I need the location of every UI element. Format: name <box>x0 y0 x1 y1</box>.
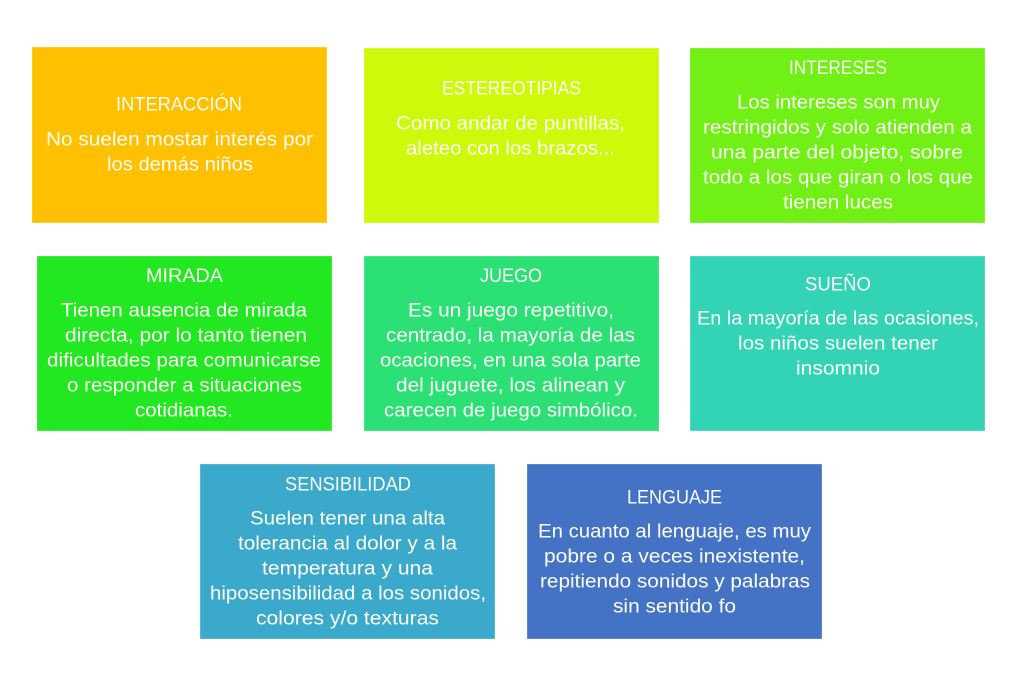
panel: juego <box>364 256 659 431</box>
text block: sueño <box>697 308 979 379</box>
heading: estereotipias: ESTEREOTIPIAS <box>442 78 581 99</box>
text block: lenguaje: En cuanto al lenguaje, es muy <box>538 521 812 542</box>
text block: interacción: los demás niños <box>107 154 253 175</box>
text block: mirada: directa, por lo tanto tienen <box>65 325 307 346</box>
text block: sensibilidad: colores y/o texturas <box>256 608 439 629</box>
text block: intereses: Los intereses son muy <box>737 92 941 113</box>
panel: sensibilidad <box>200 464 495 639</box>
text block: intereses <box>703 92 973 213</box>
text block: juego <box>380 300 641 421</box>
text block: lenguaje: repitiendo sonidos y palabras <box>540 571 810 592</box>
text block: sensibilidad: hiposensibilidad a los sonidos, <box>210 583 486 604</box>
text block: sueño: insomnio <box>796 358 880 379</box>
heading: juego: JUEGO <box>480 266 542 287</box>
text block: sueño: En la mayoría de las ocasiones, <box>697 308 979 329</box>
text block: juego: Es un juego repetitivo, <box>408 300 614 321</box>
panel: sueño <box>690 256 985 431</box>
text block: sensibilidad <box>210 508 486 629</box>
text block: mirada: Tienen ausencia de mirada <box>61 300 307 321</box>
text block: mirada: dificultades para comunicarse <box>47 350 321 371</box>
text block: juego: centrado, la mayoría de las <box>386 325 635 346</box>
text block: juego: ocaciones, en una sola parte <box>380 350 641 371</box>
heading: interacción: INTERACCIÓN <box>116 93 242 115</box>
heading: sensibilidad: SENSIBILIDAD <box>285 474 411 495</box>
text block: intereses: restringidos y solo atienden a <box>703 117 972 138</box>
panel: lenguaje <box>527 464 822 639</box>
panel: intereses <box>690 48 985 223</box>
text block: mirada: o responder a situaciones <box>67 375 302 396</box>
text block: juego: del juguete, los alinean y <box>396 375 626 396</box>
text block: mirada: cotidianas. <box>135 400 233 421</box>
panel: interacción <box>32 47 327 223</box>
text block: intereses: una parte del objeto, sobre <box>711 142 963 163</box>
text block: interacción: No suelen mostar interés por <box>46 129 314 150</box>
panel: estereotipias <box>364 48 659 223</box>
heading: lenguaje: LENGUAJE <box>627 487 722 508</box>
text block: lenguaje: pobre o a veces inexistente, <box>544 546 805 567</box>
text block: lenguaje: sin sentido fo <box>613 596 736 617</box>
text block: mirada <box>47 300 321 421</box>
heading: mirada: MIRADA <box>146 266 223 287</box>
text block: estereotipias: Como andar de puntillas, <box>396 113 625 134</box>
text block: sensibilidad: temperatura y una <box>262 558 433 579</box>
text block: interacción <box>46 129 314 175</box>
text block: sueño: los niños suelen tener <box>738 333 939 354</box>
text block: sensibilidad: tolerancia al dolor y a la <box>238 533 457 554</box>
text block: intereses: todo a los que giran o los que <box>703 167 973 188</box>
text block: estereotipias: aleteo con los brazos... <box>406 138 615 159</box>
text block: estereotipias <box>396 113 625 159</box>
text block: lenguaje <box>538 521 812 617</box>
text block: intereses: tienen luces <box>783 192 893 213</box>
panel: mirada <box>37 256 332 431</box>
text block: juego: carecen de juego simbólico. <box>384 400 638 421</box>
heading: sueño: SUEÑO <box>805 273 871 295</box>
heading: intereses: INTERESES <box>789 58 887 79</box>
text block: sensibilidad: Suelen tener una alta <box>250 508 445 529</box>
